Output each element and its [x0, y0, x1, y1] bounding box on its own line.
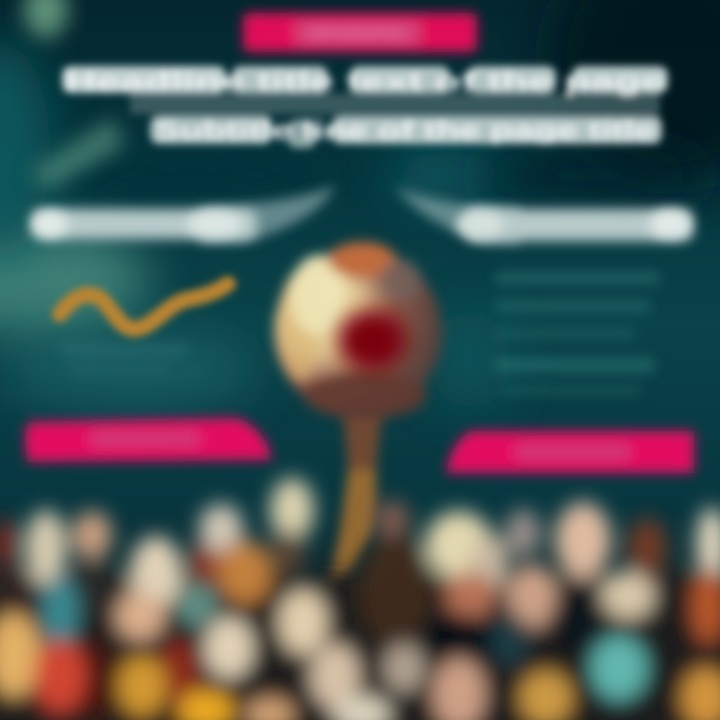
text block: left: [60, 345, 190, 373]
heading badge: [243, 13, 477, 52]
globe: [274, 242, 442, 419]
dark crowd base: [0, 575, 720, 720]
icon: corner logo: [24, 0, 68, 38]
title: Subtitle line of the page title: [155, 115, 655, 145]
title: [62, 66, 668, 148]
heading badge: INFOGRAPHIC: [309, 25, 407, 41]
text block: right: [495, 272, 660, 395]
crowd of people: [0, 478, 720, 720]
right banner: [395, 186, 693, 243]
trophy: globe on a stand: [274, 242, 442, 595]
left banner: [32, 186, 335, 243]
stand: [325, 410, 382, 595]
button: right pink: [446, 431, 694, 473]
title: Headline title text of the page: [65, 66, 665, 96]
decorative streak beneath the title: [30, 118, 125, 190]
button: left pink: [25, 418, 272, 462]
globe red centre: [338, 310, 406, 370]
line chart: orange squiggle: [60, 284, 228, 329]
